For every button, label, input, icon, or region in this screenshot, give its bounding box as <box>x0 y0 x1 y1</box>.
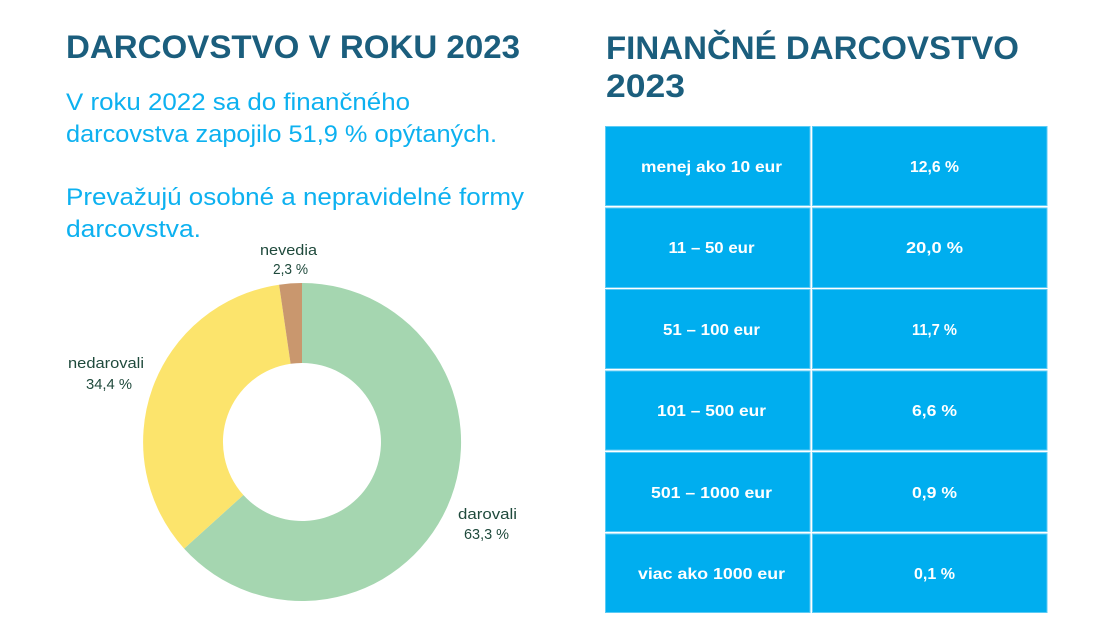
slice: darovali 63,3 % <box>184 283 461 601</box>
intro text block: V roku 2022 sa do finančného <box>66 89 410 116</box>
label: nedarovali: nedarovali <box>68 355 144 372</box>
right heading: FINANČNÉ DARCOVSTVO <box>606 30 1019 66</box>
donut chart <box>143 283 461 601</box>
intro text block: darcovstva zapojilo 51,9 % opýtaných. <box>66 121 497 148</box>
slice: nedarovali 34,4 % <box>143 285 291 549</box>
right heading: 2023 <box>606 68 685 104</box>
label: nevedia: 2,3 % <box>273 261 308 278</box>
slice: nevedia 2,3 % <box>279 283 302 364</box>
row: 101 – 500 eur <box>606 371 1047 450</box>
row: 51 – 100 eur: 51 – 100 eur <box>663 322 760 339</box>
label: darovali <box>458 506 517 543</box>
label: nevedia: nevedia <box>260 242 318 259</box>
row: menej ako 10 eur <box>606 126 1047 206</box>
intro text block <box>66 89 524 243</box>
intro text block: darcovstva. <box>66 216 201 243</box>
label: nedarovali: 34,4 % <box>86 376 132 393</box>
left heading: DARCOVSTVO V ROKU 2023 <box>66 29 520 65</box>
row: 101 – 500 eur: 6,6 % <box>912 403 957 420</box>
label: darovali: darovali <box>458 506 517 523</box>
intro text block: Prevažujú osobné a nepravidelné formy <box>66 184 524 211</box>
row: 101 – 500 eur: 101 – 500 eur <box>657 403 766 420</box>
row: 11 – 50 eur: 20,0 % <box>906 240 963 257</box>
row: 501 – 1000 eur: 0,9 % <box>912 485 957 502</box>
row: viac ako 1000 eur: 0,1 % <box>914 566 955 583</box>
right heading <box>606 30 1019 104</box>
row: 501 – 1000 eur <box>606 452 1047 532</box>
row: 51 – 100 eur: 11,7 % <box>912 322 957 339</box>
label: nevedia <box>260 242 318 278</box>
row: 11 – 50 eur <box>606 208 1047 288</box>
row: viac ako 1000 eur <box>606 534 1047 612</box>
row: 51 – 100 eur <box>606 290 1047 368</box>
donation table <box>606 126 1047 612</box>
row: 11 – 50 eur: 11 – 50 eur <box>668 240 754 257</box>
row: menej ako 10 eur: menej ako 10 eur <box>641 159 782 176</box>
row: viac ako 1000 eur: viac ako 1000 eur <box>638 566 785 583</box>
row: menej ako 10 eur: 12,6 % <box>910 159 959 176</box>
label: nedarovali <box>68 355 144 393</box>
label: darovali: 63,3 % <box>464 526 509 543</box>
row: 501 – 1000 eur: 501 – 1000 eur <box>651 485 772 502</box>
